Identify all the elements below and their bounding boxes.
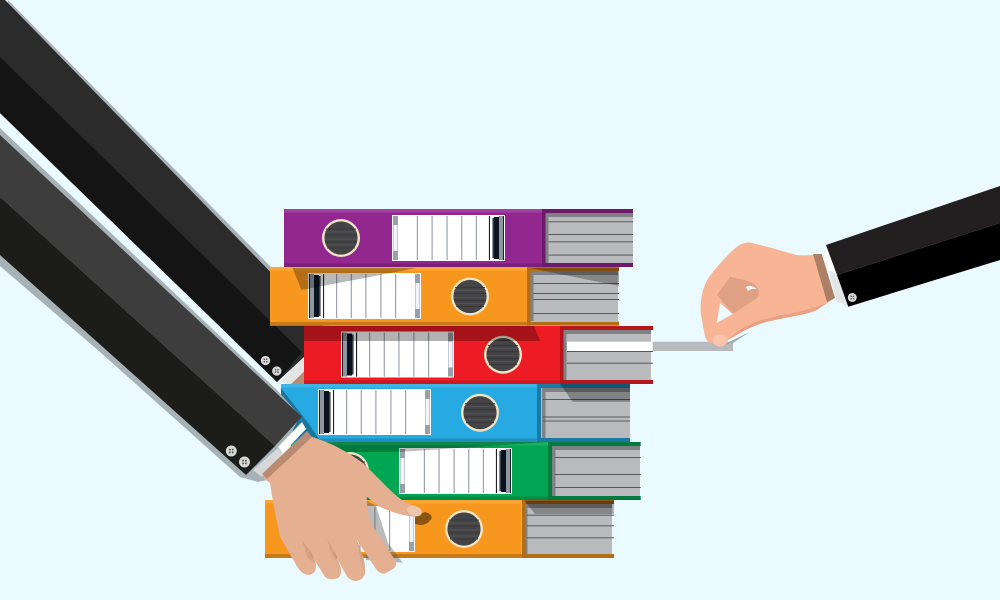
shadow on red binder	[304, 326, 540, 341]
binder: red	[304, 326, 653, 384]
hand shadows on binders	[366, 500, 432, 563]
shadow on green binder	[321, 442, 548, 452]
left thumb nail	[406, 504, 423, 518]
binder: green	[291, 442, 641, 500]
binder: purple	[284, 209, 633, 267]
shadow on orange binder	[292, 268, 619, 290]
right arm	[824, 186, 1000, 307]
binder: orange bottom	[265, 500, 614, 558]
lower left arm	[0, 128, 306, 482]
binder: blue	[281, 384, 630, 442]
upper left arm	[0, 0, 333, 386]
pulled sheet	[653, 342, 733, 351]
shadow on blue binder	[281, 384, 630, 442]
binder: orange top	[270, 267, 619, 326]
left hand	[262, 431, 423, 581]
right hand	[701, 242, 835, 346]
right fingertip	[713, 334, 727, 346]
